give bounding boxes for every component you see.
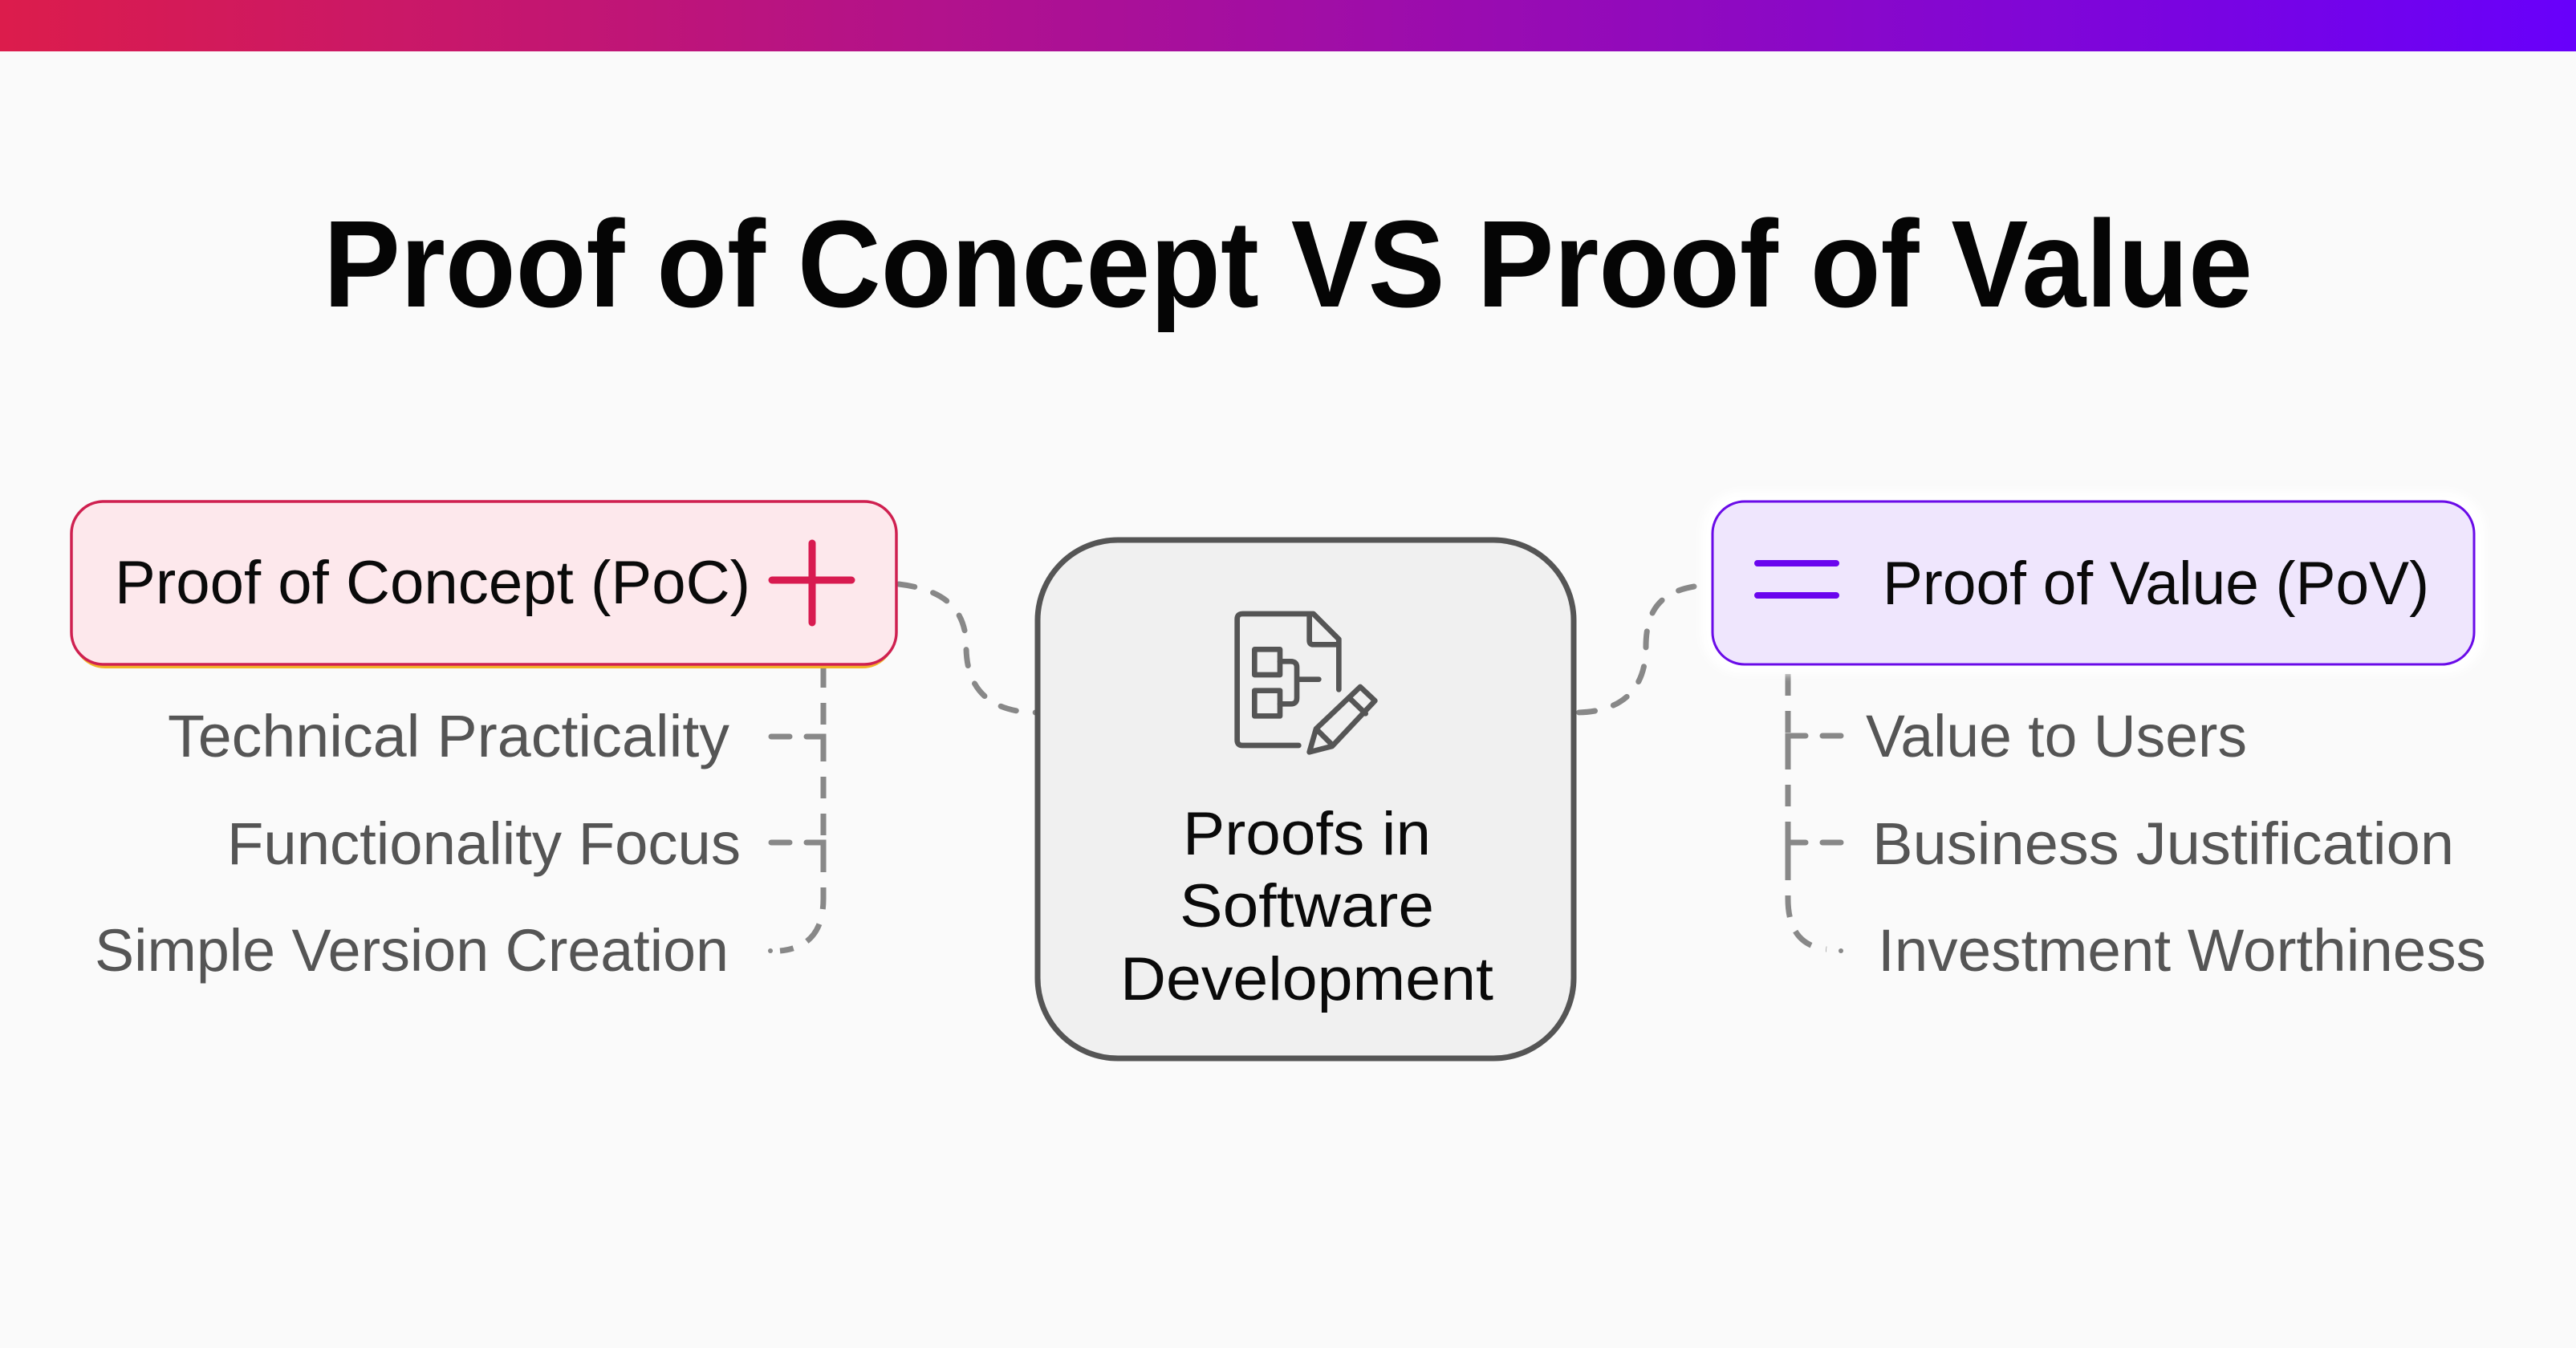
- panel: Proof of Value: [1701, 491, 2485, 674]
- title: Proof of Concept VS Proof of Value: [323, 195, 2253, 333]
- item: Simple Version Creation: Simple Version Creation: [95, 917, 729, 984]
- connector: PoC to center: [899, 584, 1037, 713]
- connector: PoV to center: [1575, 587, 1694, 713]
- item: Business Justification: Business Justification: [1872, 810, 2454, 877]
- icon: document with flowchart and pencil: [1237, 614, 1375, 752]
- label: Proof of Concept (PoC): Proof of Concept (PoC): [115, 549, 750, 617]
- center label: Proofs in: [1183, 800, 1431, 868]
- item: Functionality Focus: Functionality Focus: [227, 810, 741, 877]
- center label: Software: [1180, 872, 1434, 940]
- panel: Proof of Concept: [71, 501, 896, 668]
- center label: [1120, 800, 1493, 1013]
- PoC branch connectors: [768, 666, 823, 953]
- top gradient bar: [0, 0, 2576, 51]
- item: Technical Practicality: Technical Practicality: [168, 703, 729, 769]
- panel: center node: [1038, 540, 1574, 1058]
- item: Value to Users: Value to Users: [1866, 703, 2247, 769]
- PoV branch connectors: [1788, 674, 1843, 953]
- icon: equals: [1757, 563, 1836, 595]
- PoC list: [95, 703, 741, 984]
- PoV list: [1866, 703, 2486, 984]
- center label: Development: [1120, 945, 1493, 1013]
- label: Proof of Value (PoV): Proof of Value (PoV): [1883, 550, 2429, 618]
- icon: plus: [772, 543, 851, 623]
- item: Investment Worthiness: Investment Worthiness: [1878, 917, 2486, 984]
